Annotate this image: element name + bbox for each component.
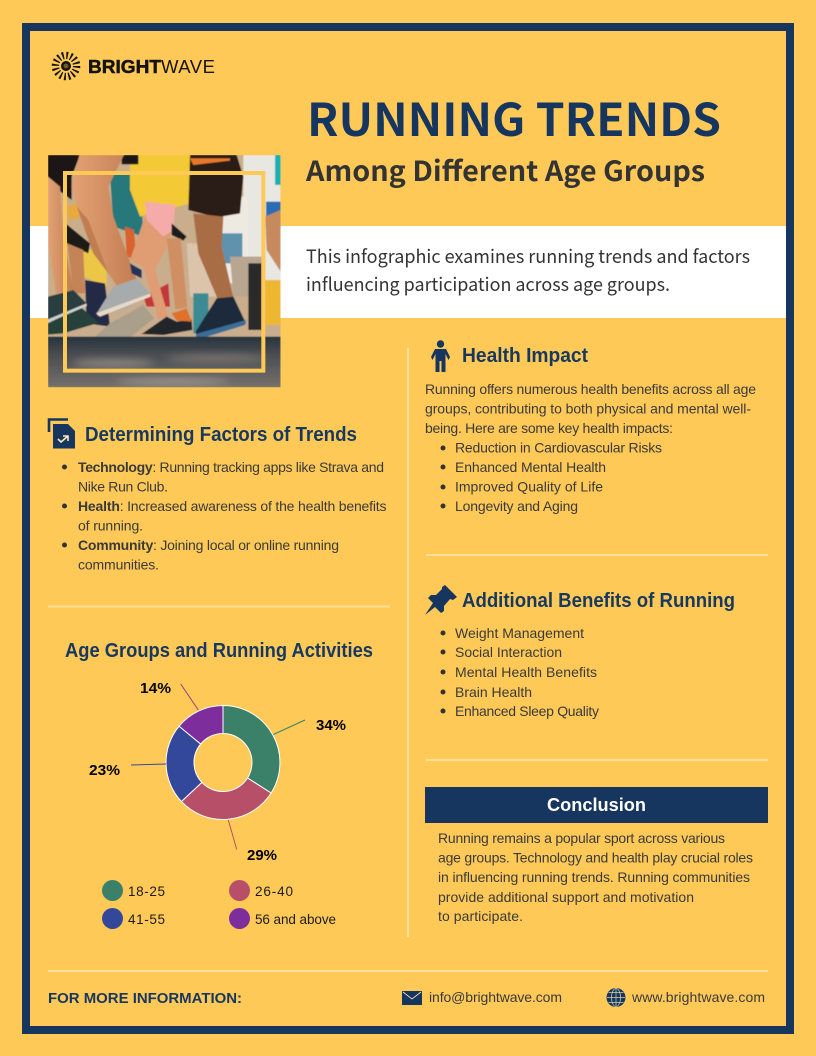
- bullet list: of running.: [78, 518, 143, 534]
- conclusion text: in influencing running trends. Running communities: [438, 869, 750, 885]
- logo wordmark: BRIGHT: [88, 56, 162, 77]
- intro text: [306, 243, 750, 297]
- legend: 41-55: [128, 912, 165, 927]
- email: info@brightwave.com: [429, 989, 562, 1005]
- bullet list: Enhanced Mental Health: [455, 459, 606, 475]
- footer: [48, 988, 765, 1007]
- paragraph: groups, contributing to both physical and mental well-: [425, 400, 751, 416]
- footer label: FOR MORE INFORMATION:: [48, 991, 242, 1007]
- conclusion header bar: [425, 787, 768, 823]
- legend: 18-25: [128, 884, 165, 899]
- leader lines: [131, 684, 305, 849]
- intro text: influencing participation across age groups.: [306, 271, 670, 297]
- bullet list: Brain Health: [455, 684, 532, 700]
- bullet list: Community: Joining local or online running: [78, 537, 339, 553]
- website: www.brightwave.com: [631, 989, 765, 1005]
- bullet list: [440, 440, 662, 514]
- bullet list: Social Interaction: [455, 644, 562, 660]
- logo wordmark: WAVE: [161, 56, 215, 77]
- bullet list: Health: Increased awareness of the health benefits: [78, 498, 386, 514]
- conclusion text: [438, 830, 753, 924]
- paragraph: [425, 381, 756, 436]
- intro text: This infographic examines running trends and factors: [306, 243, 750, 269]
- conclusion heading: Conclusion: [547, 794, 646, 815]
- logo: Brightwave: [55, 55, 215, 77]
- bullet list: [62, 459, 386, 572]
- bullet list: Technology: Running tracking apps like Strava and: [78, 459, 384, 475]
- icon: push pin: [425, 585, 457, 615]
- conclusion text: provide additional support and motivation: [438, 889, 694, 905]
- legend: 56 and above: [255, 912, 336, 927]
- icon: globe: [606, 988, 626, 1007]
- panel: determining factors: [49, 420, 386, 572]
- icon: human body: [431, 340, 450, 372]
- data labels: 29%: [247, 847, 277, 864]
- data labels: 23%: [89, 762, 120, 779]
- title: RUNNING TRENDS: [307, 84, 721, 149]
- bullet list: Reduction in Cardiovascular Risks: [455, 440, 662, 456]
- heading: Determining Factors of Trends: [85, 423, 357, 446]
- chart heading: Age Groups and Running Activities: [65, 639, 373, 662]
- bullet list: communities.: [78, 556, 159, 572]
- paragraph: Running offers numerous health benefits across all age: [425, 381, 756, 397]
- bullet list: Weight Management: [455, 625, 584, 641]
- photo: runners' legs and shoes: [48, 155, 281, 388]
- bullet list: [440, 625, 599, 719]
- white intro band: [30, 226, 786, 318]
- data labels: 34%: [316, 717, 346, 734]
- bullet list: Nike Run Club.: [78, 478, 168, 494]
- panel: donut chart section: [65, 639, 373, 929]
- panel: additional benefits: [425, 585, 735, 719]
- dividers: [48, 348, 768, 971]
- heading: Additional Benefits of Running: [462, 589, 735, 612]
- conclusion text: to participate.: [438, 908, 523, 924]
- legend: 26-40: [255, 884, 293, 899]
- bullet list: Enhanced Sleep Quality: [455, 703, 599, 719]
- logo wordmark: [88, 56, 215, 77]
- donut chart: [166, 706, 280, 819]
- conclusion text: Running remains a popular sport across various: [438, 830, 725, 846]
- subtitle: Among Different Age Groups: [305, 150, 705, 190]
- data labels: 14%: [140, 680, 171, 697]
- icon: envelope: [402, 991, 422, 1005]
- legend: [102, 880, 336, 929]
- icon: sun: [55, 55, 77, 77]
- data labels: [89, 680, 346, 864]
- bullet list: Improved Quality of Life: [455, 478, 603, 494]
- paragraph: being. Here are some key health impacts:: [425, 420, 673, 436]
- panel: health impact: [425, 340, 756, 514]
- heading: Health Impact: [462, 344, 588, 367]
- bullet list: Longevity and Aging: [455, 498, 578, 514]
- panel: conclusion: [425, 787, 768, 924]
- conclusion text: age groups. Technology and health play crucial roles: [438, 850, 753, 866]
- icon: documents: [49, 420, 75, 448]
- bullet list: Mental Health Benefits: [455, 664, 597, 680]
